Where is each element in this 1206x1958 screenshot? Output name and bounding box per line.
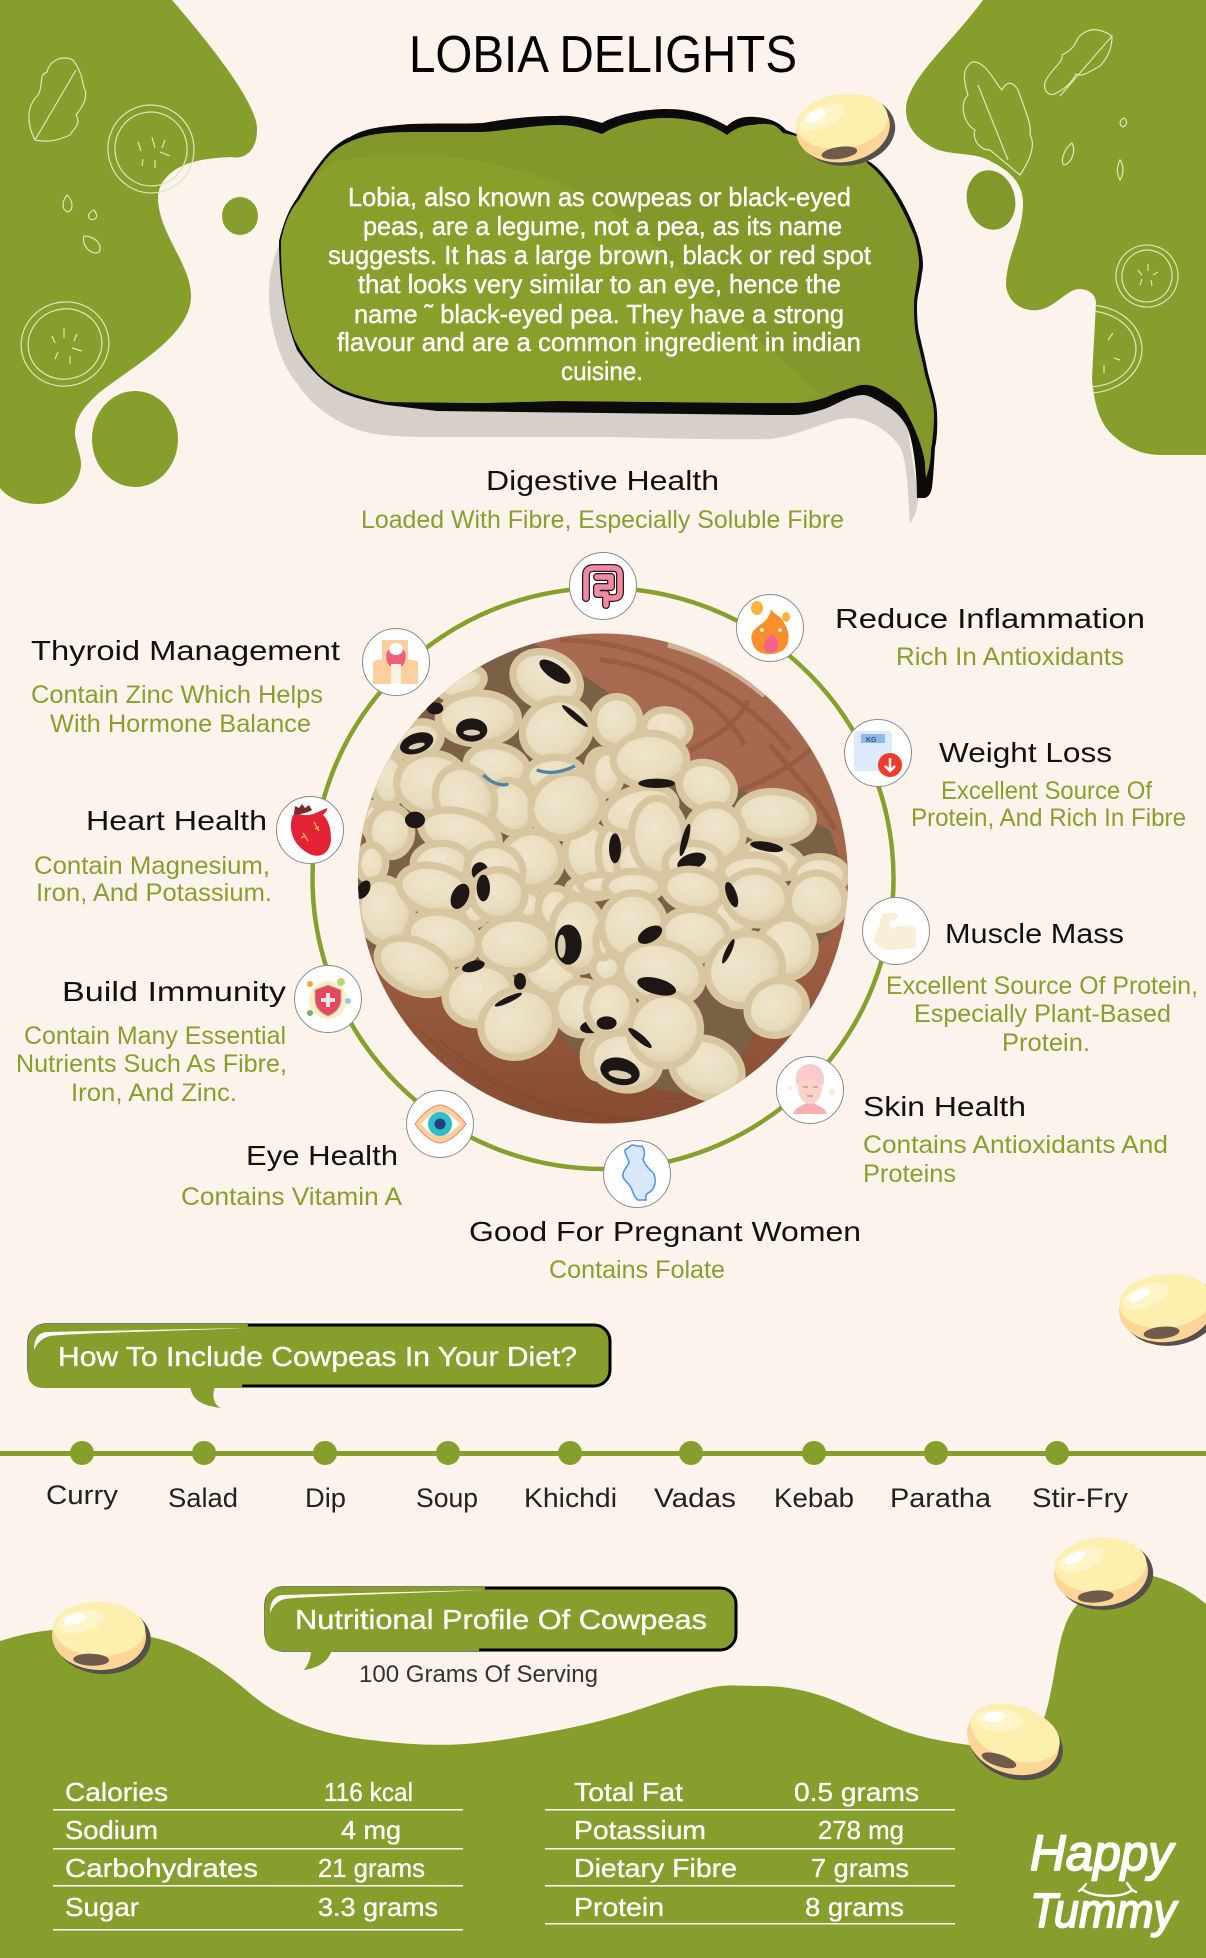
icon: eye — [406, 1090, 474, 1158]
timeline: ways to eat cowpeas: Soup — [416, 1483, 478, 1513]
nutrition table: left: Sugar — [65, 1892, 139, 1922]
label: good for pregnant women — [469, 1216, 861, 1284]
label: skin health: Skin Health — [863, 1091, 1026, 1122]
label: reduce inflammation: Reduce Inflammation — [835, 603, 1145, 634]
timeline: ways to eat cowpeas — [0, 1441, 1206, 1513]
nutrition table: left: 3.3 grams — [318, 1892, 438, 1922]
bean: right edge — [1116, 1269, 1206, 1351]
nutrition table: left: Sodium — [65, 1815, 158, 1845]
nutrition table: right: 0.5 grams — [794, 1777, 919, 1807]
icon: flexed muscle — [862, 898, 930, 964]
nutrition table: right: Total Fat — [574, 1777, 684, 1807]
label: build immunity: Build Immunity — [62, 976, 286, 1007]
nutrition table: right — [545, 1777, 955, 1924]
timeline: ways to eat cowpeas: Stir-Fry — [1032, 1483, 1129, 1513]
icon: skin care face — [776, 1056, 844, 1124]
intro paragraph: peas, are a legume, not a pea, as its name — [363, 211, 842, 241]
label: digestive health: Digestive Health — [486, 465, 719, 496]
label: weight loss: Protein, And Rich In Fibre — [911, 804, 1186, 832]
label: skin health: Contains Antioxidants And — [863, 1131, 1168, 1159]
timeline: ways to eat cowpeas: Vadas — [654, 1483, 736, 1513]
label: muscle mass: Excellent Source Of Protein, — [886, 972, 1198, 1000]
nutrition table: right: Protein — [574, 1892, 664, 1922]
label: weight loss: Excellent Source Of — [941, 777, 1152, 805]
title: LOBIA DELIGHTS — [409, 26, 797, 84]
logo: Happy Tummy — [1030, 1825, 1179, 1938]
intro paragraph: suggests. It has a large brown, black or red spot — [328, 240, 872, 270]
label: thyroid management: Thyroid Management — [31, 635, 340, 666]
nutrition table: right: 7 grams — [811, 1853, 909, 1883]
label: weight loss: Weight Loss — [939, 737, 1112, 768]
heading pill: how to include cowpeas — [28, 1324, 610, 1408]
label: build immunity: Contain Many Essential — [24, 1022, 286, 1050]
timeline: ways to eat cowpeas: Khichdi — [524, 1483, 617, 1513]
label: eye health: Contains Vitamin A — [181, 1183, 402, 1211]
label: muscle mass — [886, 918, 1198, 1057]
nutrition table: right: 278 mg — [818, 1815, 904, 1845]
photo: cowpeas on wooden plate — [351, 633, 849, 1124]
label: eye health — [181, 1140, 402, 1211]
label: build immunity: Iron, And Zinc. — [71, 1079, 237, 1107]
nutrition table: left: 4 mg — [341, 1815, 401, 1845]
icon: heart — [276, 796, 344, 864]
label: good for pregnant women: Contains Folate — [549, 1256, 725, 1284]
green hills background — [0, 1574, 1206, 1958]
label: muscle mass: Protein. — [1002, 1029, 1090, 1057]
heading pill: nutritional profile: Nutritional Profile Of Cowpeas — [295, 1604, 707, 1635]
label: eye health: Eye Health — [246, 1140, 398, 1171]
nutrition table: left: Carbohydrates — [65, 1853, 258, 1883]
label: good for pregnant women: Good For Pregnant Women — [469, 1216, 861, 1247]
label: reduce inflammation — [835, 603, 1145, 671]
bean: hill top right — [1052, 1535, 1156, 1613]
label: thyroid management — [31, 635, 340, 738]
bean: hill lower right — [957, 1693, 1073, 1792]
label: heart health: Heart Health — [86, 805, 267, 836]
nutrition table: right: 8 grams — [805, 1892, 904, 1922]
nutrition table: left: 21 grams — [318, 1853, 425, 1883]
label: muscle mass: Muscle Mass — [945, 918, 1124, 949]
logo: Happy Tummy: Tummy — [1030, 1885, 1179, 1938]
nutrition table: left — [53, 1777, 463, 1930]
label: muscle mass: Especially Plant-Based — [914, 1000, 1171, 1028]
decoration: top-left green blob — [0, 0, 258, 504]
beans: top-left quadrant — [358, 641, 616, 903]
label: build immunity — [16, 976, 287, 1107]
label: digestive health: Loaded With Fibre, Especially Soluble Fibre — [361, 506, 844, 534]
nutrition table: right: Dietary Fibre — [574, 1853, 737, 1883]
label: thyroid management: Contain Zinc Which Helps — [31, 681, 323, 709]
icon: thyroid — [362, 628, 430, 696]
timeline: ways to eat cowpeas: Kebab — [774, 1483, 854, 1513]
heading pill: how to include cowpeas: How To Include Cowpeas In Your Diet? — [58, 1341, 577, 1372]
logo: Happy Tummy: Happy — [1030, 1825, 1176, 1881]
nutrition table: left: 116 kcal — [324, 1777, 413, 1807]
decoration: top-right green blob — [906, 0, 1206, 455]
intro paragraph: name ˜ black-eyed pea. They have a strong — [354, 299, 844, 329]
icon: weight scale — [844, 720, 912, 786]
nutrition table: left: Calories — [65, 1777, 168, 1807]
label: heart health — [34, 805, 272, 907]
label: digestive health — [361, 465, 844, 534]
timeline: ways to eat cowpeas: Curry — [46, 1480, 119, 1510]
serving note: 100 Grams Of Serving — [359, 1661, 598, 1688]
icon: weight scale: KG — [866, 737, 877, 744]
intro paragraph — [328, 182, 872, 386]
label: thyroid management: With Hormone Balance — [50, 710, 311, 738]
intro paragraph: cuisine. — [561, 356, 643, 386]
bean: hill left — [51, 1600, 152, 1676]
beans: top-right quadrant — [592, 697, 847, 893]
label: reduce inflammation: Rich In Antioxidants — [896, 643, 1124, 671]
heading pill: nutritional profile — [265, 1587, 736, 1670]
bean: top — [792, 87, 900, 172]
timeline: ways to eat cowpeas: Dip — [305, 1483, 346, 1513]
timeline: ways to eat cowpeas: Paratha — [890, 1483, 992, 1513]
intro speech bubble — [269, 109, 937, 523]
icon: inflamed flame — [736, 594, 804, 662]
intro paragraph: that looks very similar to an eye, hence the — [358, 269, 841, 299]
timeline: ways to eat cowpeas: Salad — [168, 1483, 238, 1513]
beans: bottom-right quadrant — [580, 865, 849, 1109]
beans: bottom-left quadrant — [351, 858, 615, 1078]
icon: immunity shield — [294, 966, 362, 1032]
benefits ring — [312, 588, 894, 1169]
label: build immunity: Nutrients Such As Fibre, — [16, 1050, 287, 1078]
label: heart health: Iron, And Potassium. — [36, 879, 272, 907]
nutrition table: right: Potassium — [574, 1815, 706, 1845]
icon: pregnant woman — [604, 1140, 670, 1208]
intro paragraph: flavour and are a common ingredient in indian — [337, 327, 861, 357]
intro paragraph: Lobia, also known as cowpeas or black-eyed — [348, 182, 851, 212]
label: skin health: Proteins — [863, 1160, 956, 1188]
label: heart health: Contain Magnesium, — [34, 852, 270, 880]
label: skin health — [863, 1091, 1168, 1188]
icon: intestines — [570, 552, 636, 620]
label: weight loss — [911, 737, 1186, 832]
